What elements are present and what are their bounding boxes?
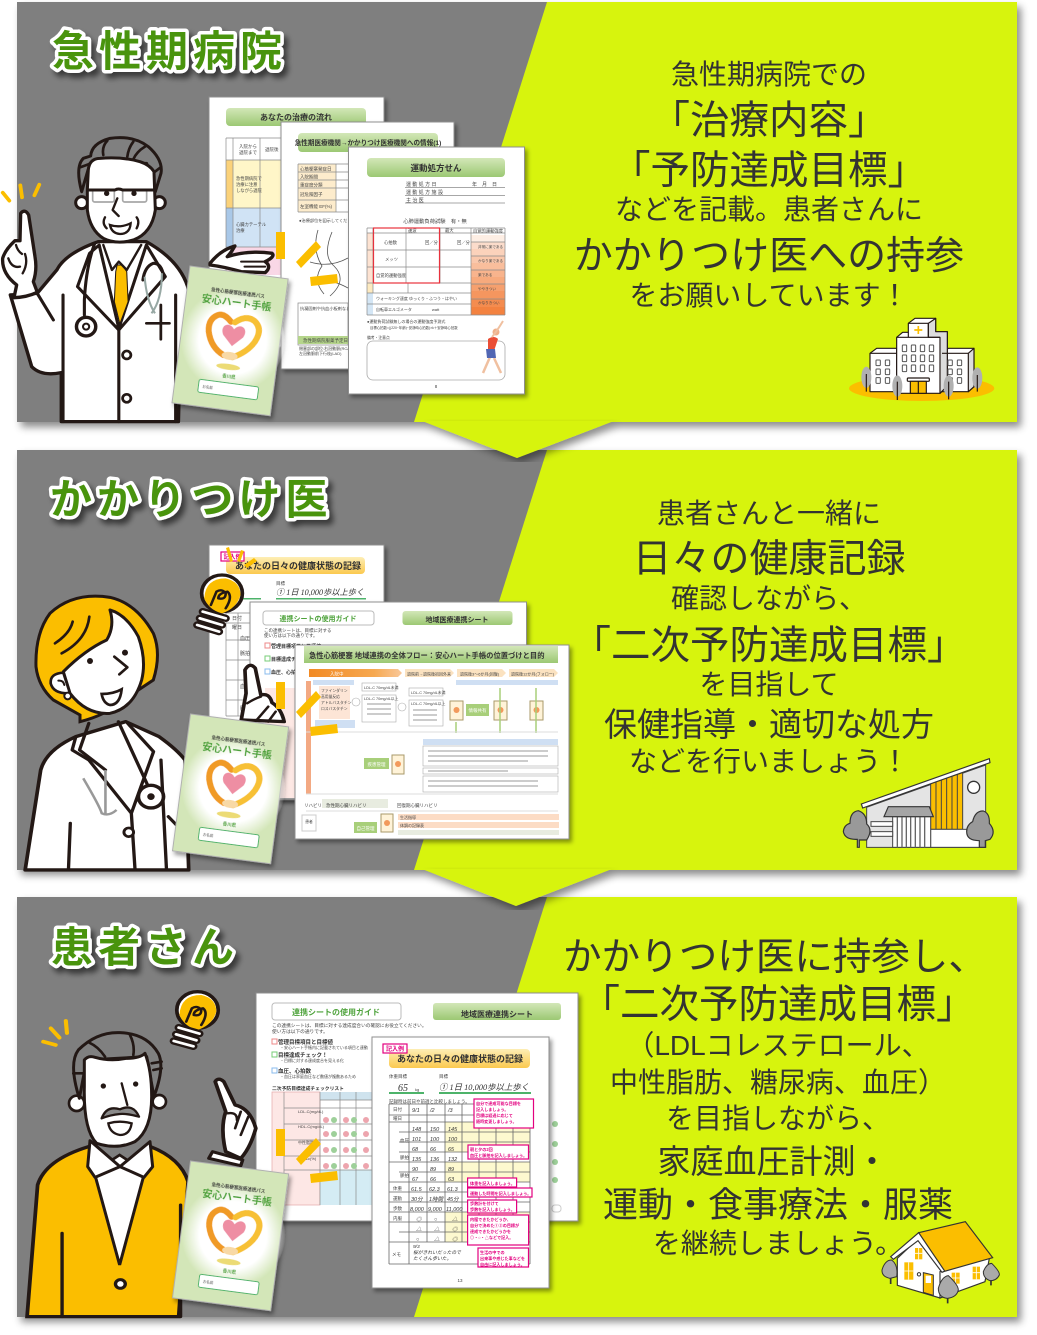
document: regional cooperation flow: 情報共有 <box>468 707 487 714</box>
document: daily health record: 血圧 <box>240 635 250 642</box>
document: daily health record example: 13 <box>457 1278 463 1283</box>
document: daily health record example: 8,000 <box>410 1207 425 1213</box>
face <box>84 1053 152 1146</box>
document: daily health record example: 桜がきれいだったので <box>413 1249 462 1256</box>
document: exercise prescription: ややきつい <box>478 286 496 291</box>
document: daily health record example: ○ <box>416 1237 419 1243</box>
pink callouts: 血圧と脈拍を記入しましょう。 <box>470 1152 527 1158</box>
document: daily health record: 曜日 <box>232 625 242 631</box>
document: daily health record example: ◎ <box>452 1236 459 1243</box>
message text: 保健指導・適切な処方 <box>604 706 934 743</box>
message text: かかりつけ医への持参 <box>574 235 964 278</box>
document: treatment flow: 心臓カテーテル <box>236 221 267 228</box>
heading: family doctor: かかりつけ医 <box>50 476 332 523</box>
heart logo <box>204 1208 261 1268</box>
patient head <box>69 1033 166 1177</box>
document: daily health record example: 運動 <box>393 1195 402 1202</box>
document: daily health record example: 9/1 <box>412 1108 420 1114</box>
document: daily health record example: 曜日 <box>393 1116 402 1122</box>
panel background <box>17 897 1017 1317</box>
document: regional cooperation flow: 生活指導 <box>400 814 416 820</box>
document: coordination sheet: 二次予防目標達成チェックリスト <box>272 1085 344 1092</box>
document: information for family doctor: 急性期病院服薬予定日 <box>303 337 348 344</box>
document: daily health record example: ◎ <box>452 1226 459 1233</box>
document: daily health record <box>209 545 384 800</box>
right hand presenting <box>210 246 273 273</box>
document: daily health record example: 90 <box>412 1167 419 1173</box>
document: regional cooperation flow: LDL-C 70mg/dL以上 <box>364 696 399 701</box>
handbook: Anshin Heart Techo: お名前 <box>202 384 214 390</box>
document: coordination sheet <box>256 993 578 1221</box>
raised hand behind handbook <box>241 665 284 722</box>
document: exercise prescription: メッツ <box>385 257 398 262</box>
document: daily health record example: 61.3 <box>447 1187 459 1193</box>
panel background <box>17 2 1017 422</box>
document: daily health record example: /3 <box>447 1108 454 1114</box>
arrow: family doctor to patient <box>422 869 612 906</box>
cardigan button <box>115 1280 125 1288</box>
message text <box>574 59 964 311</box>
document: daily health record example: たくさん歩いた。 <box>413 1255 451 1262</box>
document: coordination sheet: 目標達成チェック！ <box>278 1051 328 1059</box>
doctor coat <box>10 242 193 422</box>
panel: family doctor <box>17 450 1017 870</box>
document: daily health record example: 89 <box>448 1167 454 1173</box>
document: coordination sheet: この連携シートは、目標に対する <box>264 627 332 634</box>
document: exercise prescription: 8 <box>435 384 438 389</box>
message text: などを記載。患者さんに <box>615 194 923 225</box>
patient body <box>27 992 256 1317</box>
document: daily health record example: ① 1日 10,000歩以上歩く <box>439 1082 529 1092</box>
document: daily health record example: 65 <box>398 1083 408 1094</box>
document: coordination sheet: 管理目標項目と目標値 <box>278 1038 334 1046</box>
document: daily health record example: 脈拍 <box>400 1172 409 1179</box>
icon: hospital <box>849 318 994 401</box>
handbook: Anshin Heart Techo: 安心ハート手帳 <box>202 1187 273 1209</box>
document: coordination sheet: HbA1c(%) <box>298 1156 317 1161</box>
document: daily health record: 血圧 <box>240 683 250 690</box>
document: daily health record example: 血圧 <box>400 1137 409 1144</box>
handbook: Anshin Heart Techo <box>172 714 294 864</box>
icon: stretching figure <box>483 321 503 373</box>
pink callouts: 記入しましょう。 <box>476 1106 509 1112</box>
document: regional cooperation flow: 急性期心臓リハビリ <box>326 802 366 809</box>
document: regional cooperation flow: LDL-C 70mg/dL以上 <box>411 701 446 706</box>
handbook: Anshin Heart Techo <box>172 266 293 416</box>
document: daily health record: 日付 <box>232 615 242 622</box>
document: coordination sheet: 地域医療連携シート <box>426 615 488 624</box>
pink callouts: 随時変更しましょう。 <box>476 1118 517 1124</box>
document: coordination sheet: ・安心ハート手帳内に記載されている項目と連動 <box>280 1044 368 1050</box>
document: daily health record example: メモ <box>392 1252 401 1257</box>
document: daily health record example: 記入例 <box>386 1045 404 1053</box>
document: daily health record example: 記録時は前日や前週と比較しましょう。 <box>389 1098 470 1105</box>
document: daily health record example: △ <box>416 1226 422 1233</box>
cardigan <box>27 1147 188 1317</box>
message text: を目指して <box>699 669 839 700</box>
pink callouts: 自分で決めた①②の目標が <box>470 1222 519 1228</box>
document: coordination sheet: 連携シートの使用ガイド <box>280 614 356 623</box>
document: daily health record example: 日付 <box>393 1106 402 1113</box>
document: exercise prescription: 自覚的運動強度 <box>376 272 407 279</box>
document: treatment flow <box>209 97 384 347</box>
document: coordination sheet: 目標達成チェック <box>271 656 311 663</box>
document: daily health record example: 148 <box>412 1127 422 1133</box>
document: daily health record: 脈拍 <box>240 650 250 657</box>
document: exercise prescription: 運 動 処 方 日 <box>406 181 437 188</box>
document: exercise prescription <box>348 147 524 394</box>
document: exercise prescription: ●運動負荷試験無しの場合の運動強度予測式 <box>367 318 445 324</box>
document: regional cooperation flow: ファインダリン <box>321 688 348 693</box>
document: daily health record example: 9/3 <box>413 1244 420 1250</box>
document: information for family doctor: 左冠動脈前下行枝(LAD) <box>299 350 342 356</box>
panel: patient <box>17 897 1017 1317</box>
document: daily health record example: 歩数 <box>393 1205 402 1212</box>
pink callouts: 歩数を記入しましょう。 <box>470 1206 515 1212</box>
glasses <box>88 189 154 202</box>
handbook: Anshin Heart Techo: 香川県 <box>222 372 237 381</box>
document: exercise prescription: 運波 <box>408 227 417 234</box>
document: daily health record example: △ <box>452 1216 458 1223</box>
document: exercise prescription: かなり楽である <box>478 258 504 263</box>
pink callouts: 歩数計を付けて <box>470 1200 499 1206</box>
pink callouts <box>468 1099 534 1267</box>
document: regional cooperation flow: 退院後12か月(フォロー) <box>511 670 555 676</box>
document: exercise prescription: 心拍数 <box>384 239 398 246</box>
pink callouts: 自分で達成可能な目標を <box>476 1100 521 1106</box>
document: exercise prescription: 備考・注意点 <box>367 335 390 340</box>
handbook: Anshin Heart Techo: お名前 <box>203 1279 214 1285</box>
pink callouts: 出来事や感じた事などを <box>480 1255 525 1261</box>
document: daily health record example: 67 <box>412 1177 419 1183</box>
document: regional cooperation flow: LDL-C 70mg/dL未満 <box>364 685 399 690</box>
document: exercise prescription: 自転車エルゴメータ watt <box>376 306 440 312</box>
collar <box>88 1141 153 1177</box>
document: coordination sheet: この連携シートは、目標に対する達成度合いの確認にお役立てください。 <box>272 1022 427 1029</box>
document: exercise prescription: 回／分 <box>457 239 471 246</box>
document: daily health record example: 136 <box>430 1157 440 1163</box>
document: regional cooperation flow: LDL-C 70mg/dL未満 <box>411 690 446 695</box>
message text: 「治療内容」 <box>650 99 888 143</box>
document: information for family doctor: 重症度分類 <box>300 182 323 188</box>
raised hand <box>209 1079 256 1166</box>
message text: を継続しましょう。 <box>653 1228 903 1259</box>
document: exercise prescription: 主 治 医 <box>406 197 424 204</box>
document: daily health record example: 68 <box>412 1147 419 1153</box>
message text: かかりつけ医に持参し、 <box>563 936 987 979</box>
pink callouts: 運動した時間を記入しましょう。 <box>470 1190 531 1196</box>
document: regional cooperation flow: 高用量反応 <box>321 694 340 699</box>
document: daily health record example: 61.5 <box>411 1187 423 1193</box>
document: information for family doctor: 左室機能 EF(%) <box>300 203 332 210</box>
icon: emphasis marks <box>43 1021 67 1045</box>
document: exercise prescription: 自覚的運動強度 <box>473 228 504 234</box>
face <box>63 610 144 713</box>
document: regional cooperation flow: 入院中 <box>330 670 344 678</box>
handbook: Anshin Heart Techo: 急性心筋梗塞医療連携パス <box>211 286 266 300</box>
document: information for family doctor: 心筋梗塞発症日 <box>300 166 332 172</box>
doctor head <box>36 596 157 722</box>
message text: 運動・食事療法・服薬 <box>603 1186 953 1225</box>
document: regional cooperation flow: 回復期心臓リハビリ <box>397 802 438 809</box>
document: regional cooperation flow: 疾患管理 <box>368 761 386 768</box>
pink callouts: 達成できたかどうかを <box>470 1228 511 1234</box>
document: regional cooperation flow: 患者 <box>305 819 313 824</box>
document: coordination sheet: LDL-C(mg/dL) <box>298 1109 324 1114</box>
message text: 「予防達成目標」 <box>611 149 927 193</box>
document: exercise prescription: ウォーキング速度 ゆっくり・ふつう・はやい <box>376 295 457 301</box>
message text: 患者さんと一緒に <box>657 498 881 529</box>
document: daily health record example: 150 <box>430 1127 440 1133</box>
message text: を目指しながら、 <box>666 1103 890 1134</box>
document: exercise prescription: 運動処方せん <box>410 163 462 173</box>
document: coordination sheet <box>250 602 526 798</box>
ears <box>69 1095 166 1111</box>
pink callouts: 体重を記入しましょう。 <box>470 1180 515 1186</box>
document: daily health record example: 66 <box>430 1147 437 1153</box>
arrow: hospital to family doctor <box>422 421 614 458</box>
document: coordination sheet: 使い方は以下の通りです。 <box>264 632 318 639</box>
document: regional cooperation flow: 体調の記録表 <box>400 822 424 828</box>
document: daily health record example: 62.3 <box>429 1187 441 1193</box>
heading: acute care hospital: 急性期病院 <box>52 28 287 75</box>
face details <box>104 191 138 234</box>
document: daily health record example: 65 <box>448 1147 455 1153</box>
icon: emphasis marks <box>3 185 39 201</box>
document: daily health record example: 1時間 <box>429 1196 445 1203</box>
document: daily health record example: あなたの日々の健康状態の記録 <box>397 1053 523 1064</box>
handbook: Anshin Heart Techo: 急性心筋梗塞医療連携パス <box>211 1181 266 1195</box>
collar and lapels <box>68 723 181 870</box>
pointer dashes <box>276 232 338 286</box>
document: coordination sheet: 血圧、心拍数 <box>271 669 301 676</box>
document: regional cooperation flow: 退院前→退院後初回外来 <box>407 670 451 676</box>
document: regional cooperation flow: 退院後3〜6か月(回復) <box>460 670 500 676</box>
document: daily health record example: 145 <box>448 1127 458 1133</box>
document: coordination sheet: 使い方は以下の通りです。 <box>272 1028 328 1035</box>
document: daily health record: 脈拍 <box>240 705 250 712</box>
shirt V <box>62 1155 181 1317</box>
document: daily health record example: 9,000 <box>428 1207 443 1213</box>
document: daily health record example: /2 <box>429 1108 435 1114</box>
document: exercise prescription: 最大 <box>445 227 454 234</box>
document: treatment flow: 退院まで <box>239 149 257 156</box>
panel background <box>17 450 1017 870</box>
message text: 「二次予防達成目標」 <box>572 624 966 668</box>
pink callouts: ◎・○・△などで記入。 <box>470 1234 513 1240</box>
document: exercise prescription: 心肺運動負荷試験 有・無 <box>403 217 467 225</box>
ears <box>76 197 165 209</box>
doctor body <box>3 185 273 422</box>
document: coordination sheet: 管理目標項目と目標値 <box>271 643 321 650</box>
document: daily health record example: 66 <box>430 1177 437 1183</box>
document: daily health record: ① 1日 10,000歩以上歩く <box>276 588 364 597</box>
handbook: Anshin Heart Techo: 安心ハート手帳 <box>201 292 272 314</box>
doctor collar and tie <box>37 245 176 422</box>
hair <box>73 1033 162 1098</box>
document: daily health record: 記入例 <box>223 553 242 561</box>
document: information for family doctor: 入院期間 <box>300 174 318 180</box>
document: daily health record example: 11,000 <box>446 1207 463 1213</box>
face details <box>101 1081 139 1135</box>
raised hand <box>3 211 37 298</box>
icon: light bulb <box>197 575 242 632</box>
document: information for family doctor: 抗凝固剤や抗血小板剤など <box>300 305 351 312</box>
ear and earring <box>51 673 71 699</box>
document: daily health record example: ◎ <box>416 1216 423 1223</box>
heading: patient: 患者さん <box>51 924 239 971</box>
document: coordination sheet: HDL-C(mg/dL) <box>298 1124 325 1129</box>
document: treatment flow: 入院から <box>239 143 257 150</box>
handbook: Anshin Heart Techo: 安心ハート手帳 <box>202 740 273 762</box>
heart logo <box>204 761 261 821</box>
message text <box>563 936 987 1259</box>
document: exercise prescription: 非常に楽である <box>478 244 504 249</box>
stethoscope <box>76 243 164 336</box>
bangs strokes <box>55 617 89 653</box>
face <box>87 158 155 242</box>
pink callouts: 自由に記入しましょう。 <box>480 1261 525 1267</box>
panel: acute care hospital <box>3 2 1017 422</box>
document: daily health record example: 目標 <box>439 1073 448 1080</box>
doctor head and raised hand <box>3 138 165 298</box>
handbook: Anshin Heart Techo: 急性心筋梗塞医療連携パス <box>211 734 266 748</box>
document: daily health record example: 89 <box>430 1167 436 1173</box>
icon: light bulb <box>174 992 218 1046</box>
message text: などを行いましょう！ <box>629 746 909 777</box>
document: coordination sheet: ・血圧は家庭血圧など数値が複数あるため <box>280 1073 356 1079</box>
icon: modern house <box>843 759 993 847</box>
document: coordination sheet: 地域医療連携シート <box>461 1009 533 1019</box>
message text: をお願いしています！ <box>629 280 909 311</box>
document: daily health record example: 63 <box>448 1177 455 1183</box>
document: treatment flow: 急性期病院で <box>236 175 262 182</box>
document: regional cooperation flow: リハビリ <box>304 802 322 808</box>
document: coordination sheet: 血圧、心拍数 <box>278 1067 312 1075</box>
pointer dashes <box>226 547 338 736</box>
document: daily health record example: 内服 <box>393 1215 402 1222</box>
pink callouts: 生活の中での <box>480 1249 505 1255</box>
doctor body <box>25 575 284 870</box>
document: daily health record example: 脈拍 <box>400 1154 409 1161</box>
message text: 日々の健康記録 <box>632 538 906 581</box>
document: exercise prescription: 年 月 日 <box>472 181 497 188</box>
document: daily health record example: 45分 <box>447 1196 460 1203</box>
document: information for family doctor: 急性期医療機関→かかりつけ医療機関への情報(1) <box>295 138 441 147</box>
document: information for family doctor: 冠危険因子 <box>300 191 323 198</box>
document: daily health record example: 100 <box>448 1137 458 1143</box>
message text: （LDLコレステロール、 <box>626 1030 930 1061</box>
document: daily health record example: △ <box>434 1236 440 1243</box>
document: regional cooperation flow: 自己管理 <box>356 825 375 832</box>
document: exercise prescription: 運 動 処 方 施 設 <box>406 189 443 196</box>
face details <box>87 650 128 705</box>
document: daily health record example: △ <box>434 1226 440 1233</box>
stethoscope <box>80 722 164 837</box>
document: daily health record example: kg <box>415 1087 419 1092</box>
handbook: Anshin Heart Techo: お名前 <box>203 832 214 838</box>
document: treatment flow: 治療に注意 <box>236 181 258 188</box>
handbook: Anshin Heart Techo: 香川県 <box>222 1267 237 1276</box>
document: daily health record example: ○ <box>434 1217 437 1223</box>
document: treatment flow: 治療 <box>236 227 245 234</box>
coat buttons <box>123 351 131 402</box>
document: regional cooperation flow: アトルバスタチン <box>321 700 352 705</box>
pocket pens <box>146 305 169 339</box>
document: daily health record: あなたの日々の健康状態の記録 <box>235 560 361 571</box>
document: information for family doctor: ●治療部位を図示してください。 <box>299 217 360 224</box>
document: regional cooperation flow: ロスバスタチン <box>321 706 348 711</box>
document: daily health record example: 30分 <box>411 1196 424 1203</box>
document: regional cooperation flow: 急性心筋梗塞 地域連携の全体フロー：安心ハート手帳の位置づけと目的 <box>309 651 545 660</box>
document: regional cooperation flow <box>295 645 569 839</box>
document: coordination sheet: ・目標に対する達成度合を見える化 <box>280 1057 344 1063</box>
document: daily health record example: 100 <box>430 1137 440 1143</box>
pink callouts: 内服できたかどうか、 <box>470 1216 511 1222</box>
message text: 「二次予防達成目標」 <box>580 983 976 1027</box>
message text: 急性期病院での <box>671 59 867 90</box>
document: treatment flow: 退院後 <box>265 146 279 153</box>
handbook: Anshin Heart Techo: 香川県 <box>222 820 237 829</box>
document: coordination sheet: 連携シートの使用ガイド <box>292 1007 380 1017</box>
document: daily health record example: 体重目標 <box>389 1073 407 1080</box>
document: coordination sheet: 中性脂肪 <box>298 1139 314 1145</box>
icon: house with yellow roof <box>882 1222 999 1303</box>
message text: 確認しながら、 <box>671 583 867 614</box>
pink callouts: 朝と夕の2回 <box>470 1146 493 1152</box>
hair <box>36 596 157 722</box>
pink callouts: 目標は経過に応じて <box>476 1112 513 1118</box>
document: daily health record example: 135 <box>412 1157 422 1163</box>
handbook: Anshin Heart Techo <box>172 1161 294 1311</box>
document: daily health record example <box>372 1037 549 1288</box>
hair <box>79 138 161 192</box>
pointer dashes <box>276 1129 338 1183</box>
document: information for family doctor <box>281 122 454 369</box>
document: information for family doctor: 閉塞部の部位:右冠動脈(RCA) <box>299 345 352 351</box>
heart logo <box>204 313 260 373</box>
document: treatment flow: あなたの治療の流れ <box>260 112 332 122</box>
document: daily health record example: 132 <box>448 1157 457 1163</box>
message text: 中性脂肪、糖尿病、血圧） <box>610 1067 946 1098</box>
document: exercise prescription: 楽である <box>478 272 493 277</box>
message text <box>572 498 966 777</box>
document: daily health record example: 体重 <box>393 1185 402 1192</box>
coat <box>25 722 189 870</box>
document: exercise prescription: 目標心拍数=((220−年齢)−安静時心拍数)×k＋安静時心拍数 <box>370 325 458 330</box>
document: exercise prescription: 回／分 <box>425 239 439 246</box>
document: daily health record: 目標 <box>276 580 285 587</box>
document: treatment flow: しながら退院 <box>236 187 262 194</box>
document: exercise prescription: かなりきつい <box>478 300 500 305</box>
message text: 家庭血圧計測・ <box>658 1143 888 1180</box>
document: daily health record example: 101 <box>412 1137 421 1143</box>
